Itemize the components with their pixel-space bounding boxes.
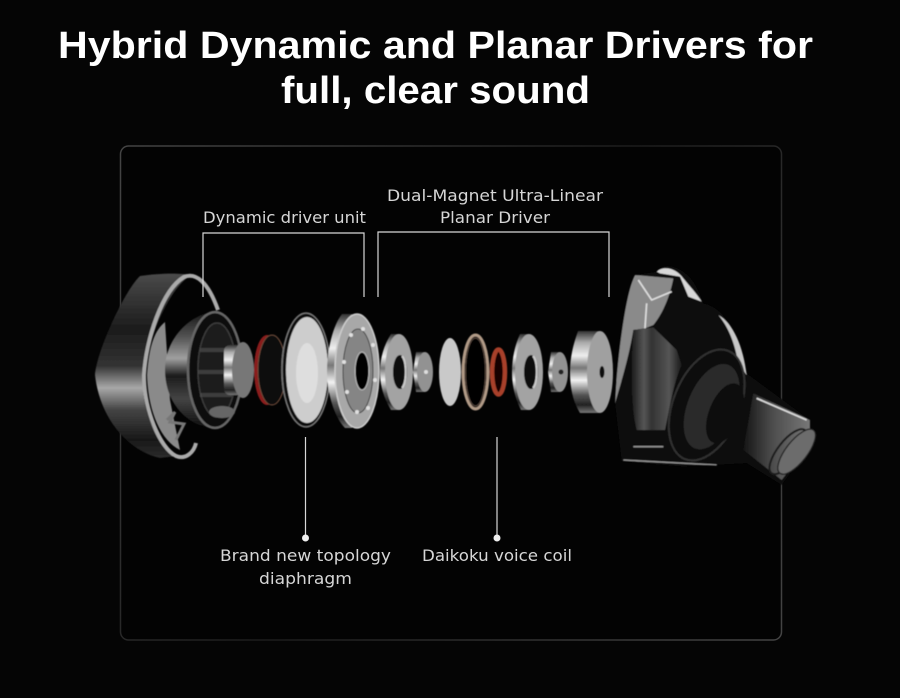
- panel frame: [120, 146, 782, 640]
- red voice coil: [254, 335, 286, 405]
- white planar diaphragm: [439, 338, 461, 406]
- dynamic driver basket: [327, 314, 379, 428]
- copper ring frame: [463, 335, 488, 409]
- earpiece shell: [615, 266, 822, 485]
- label: planar driver: Planar Driver: [440, 208, 550, 227]
- main diaphragm: [282, 313, 330, 427]
- pointer: diaphragm: [302, 437, 309, 542]
- planar washer 2: [512, 334, 543, 410]
- magnet cup: [165, 312, 242, 428]
- planar small magnet 2: [548, 352, 568, 392]
- label: planar driver: [387, 186, 603, 227]
- label: diaphragm: diaphragm: [259, 569, 352, 588]
- title: Hybrid Dynamic and Planar Drivers for: [58, 25, 813, 67]
- label: diaphragm: Brand new topology: [220, 546, 391, 565]
- bracket: planar driver: [378, 232, 609, 297]
- planar small magnet 1: [413, 352, 433, 392]
- shell housing: [95, 274, 218, 458]
- large cylinder magnet: [570, 331, 613, 413]
- planar washer 1: [380, 334, 413, 410]
- title: [58, 25, 813, 112]
- bracket: dynamic driver unit: [203, 233, 364, 297]
- pointer: voice coil: [494, 437, 500, 542]
- pole piece: [224, 342, 254, 398]
- label: dynamic driver unit: Dynamic driver unit: [203, 208, 366, 227]
- exploded view of driver assembly: [95, 266, 822, 485]
- planar voice coil: [492, 350, 505, 394]
- label: planar driver: Dual-Magnet Ultra-Linear: [387, 186, 603, 205]
- label: diaphragm: [220, 546, 391, 588]
- label: voice coil: Daikoku voice coil: [422, 546, 572, 565]
- title: full, clear sound: [281, 70, 590, 112]
